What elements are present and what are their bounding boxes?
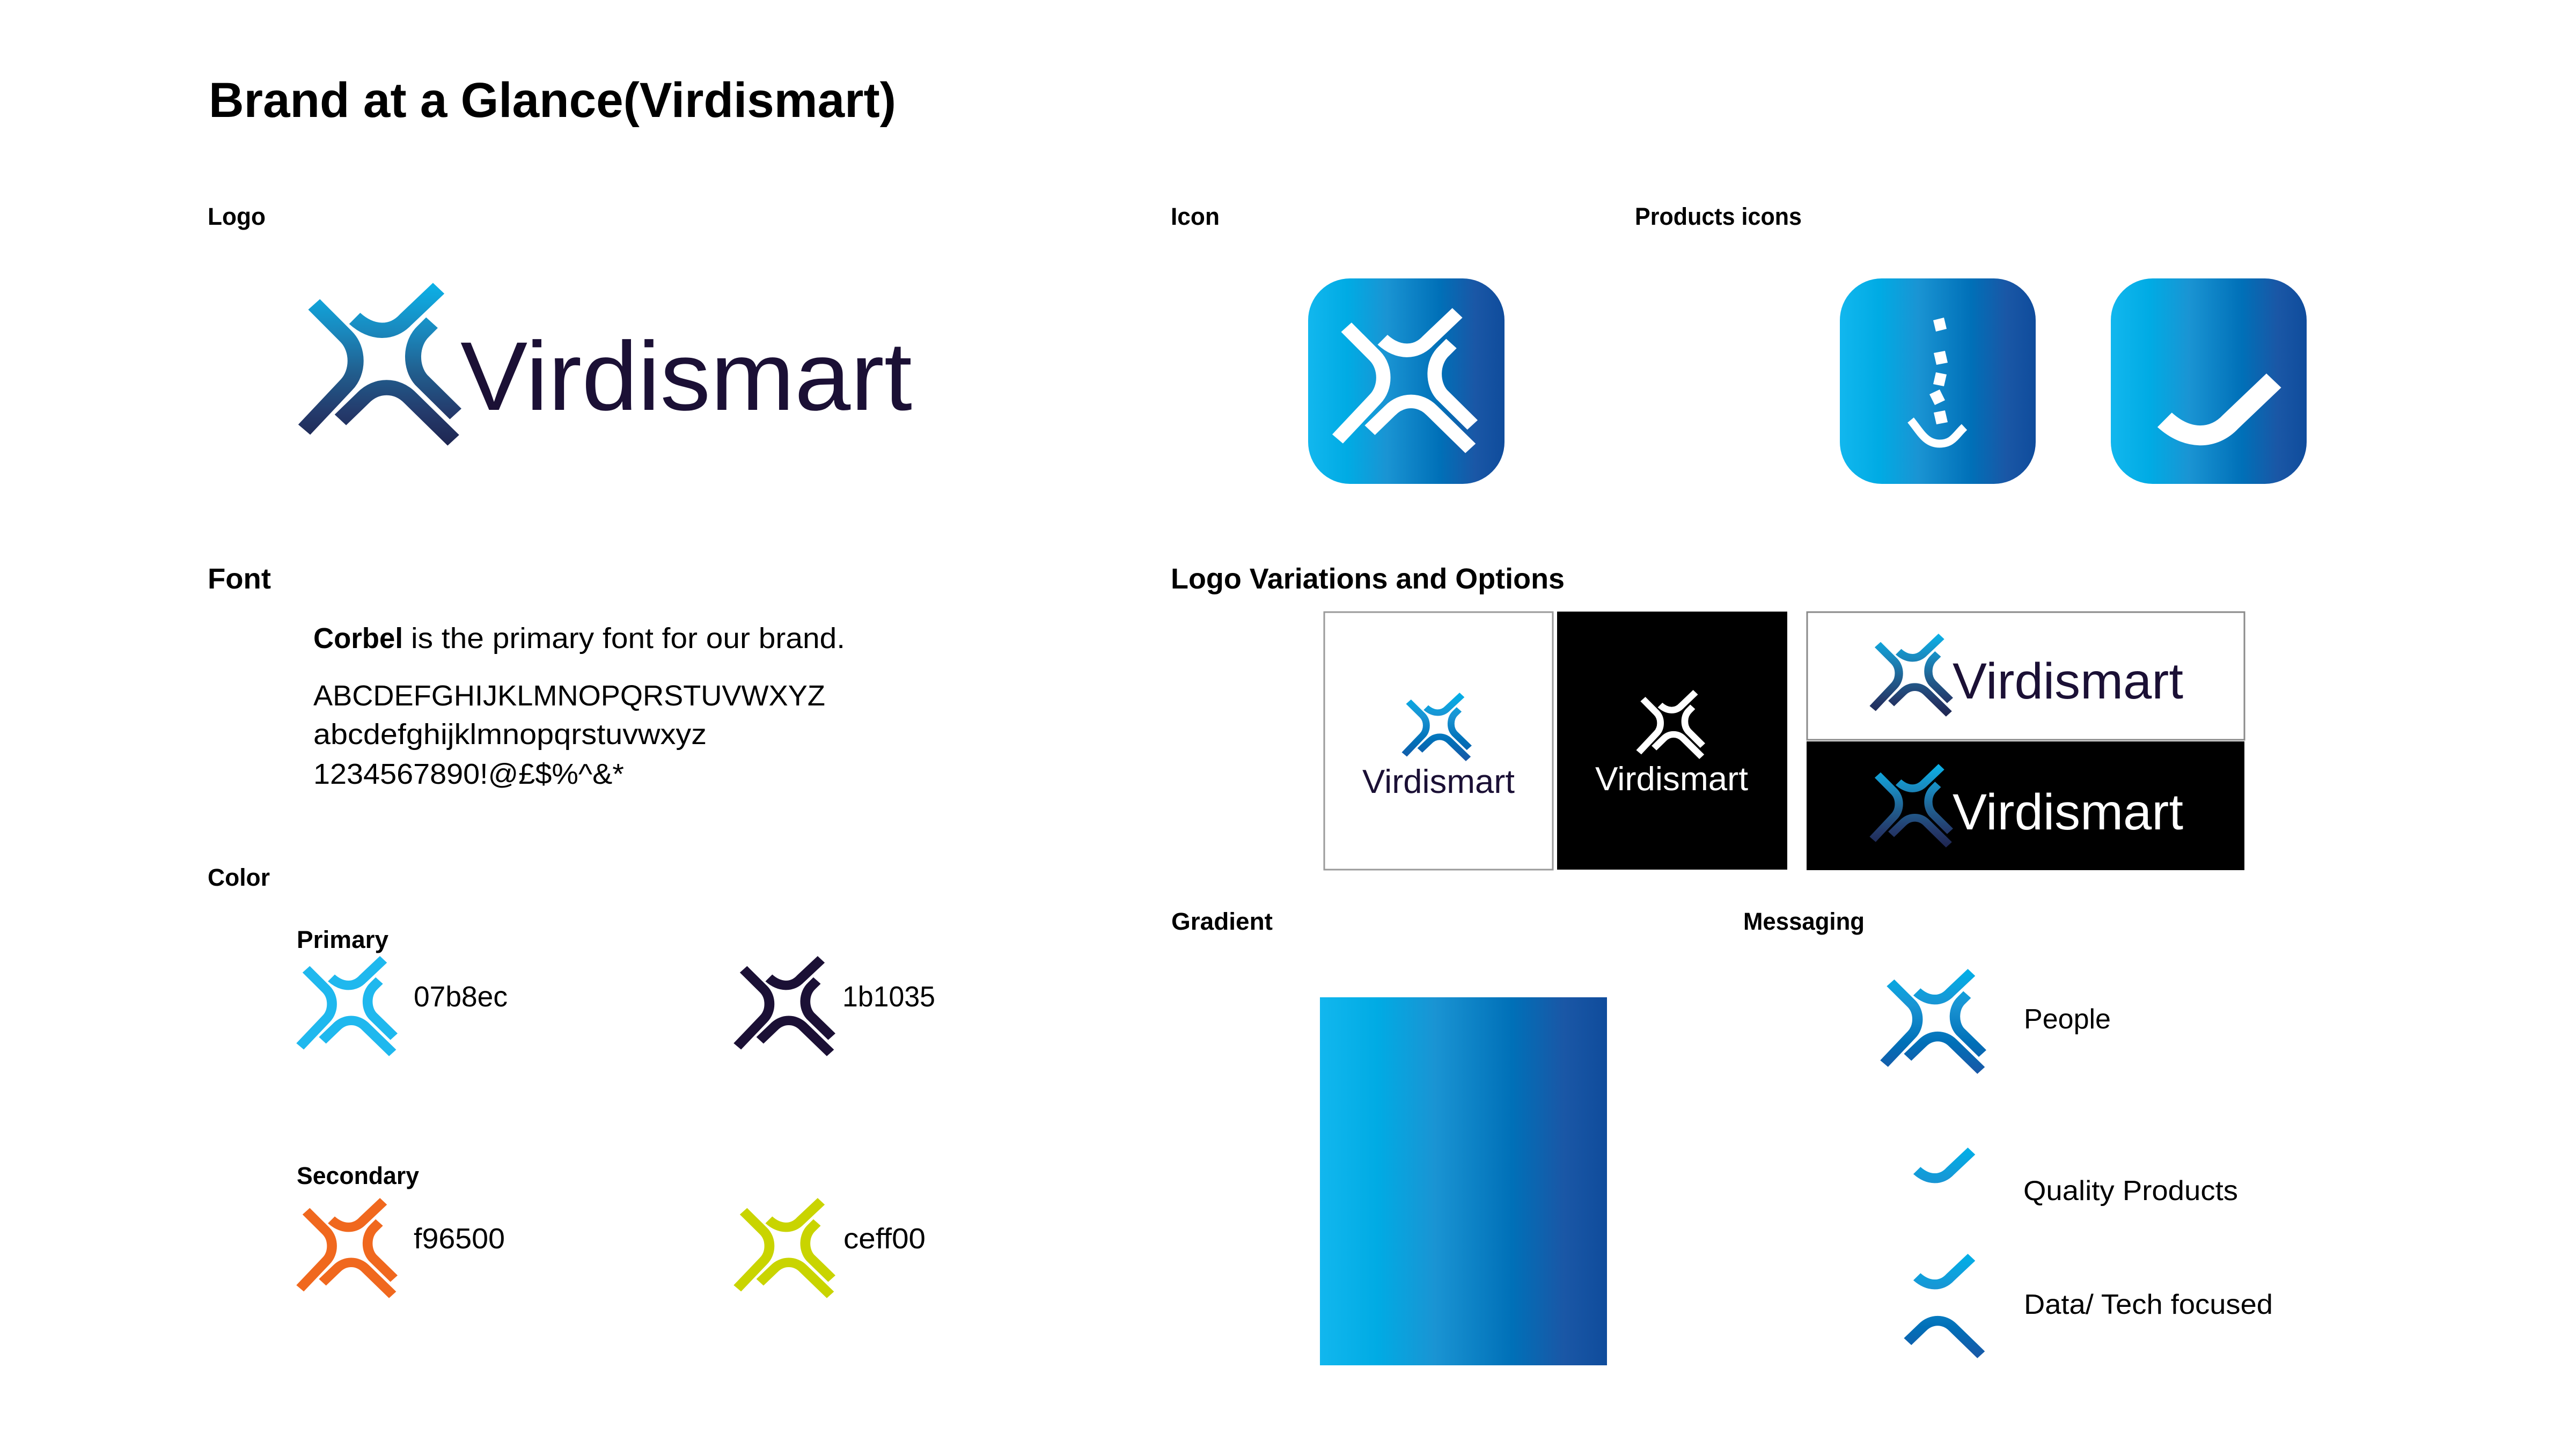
title: Brand at a Glance(Virdismart) xyxy=(209,73,896,128)
app icon xyxy=(1308,278,1504,484)
heading: gradient: Gradient xyxy=(1171,908,1273,935)
font name: Corbel xyxy=(313,622,403,654)
swatch: ceff00: ceff00 xyxy=(843,1223,926,1255)
heading: color: Color xyxy=(208,864,270,891)
heading: secondary: Secondary xyxy=(297,1162,419,1189)
product icon: check xyxy=(2111,278,2307,484)
variation: horizontal on black xyxy=(1807,741,2244,870)
heading: logo: Logo xyxy=(208,203,266,230)
icon: logo mark xyxy=(304,288,456,440)
variation: horizontal on white: Virdismart xyxy=(1953,653,2183,710)
message: quality products xyxy=(1917,1151,2238,1207)
swatch: 1b1035 xyxy=(737,959,935,1053)
swatch: 07b8ec: 07b8ec xyxy=(414,981,508,1013)
font sentence: is the primary font for our brand. xyxy=(411,622,845,654)
font specimen xyxy=(313,622,845,790)
product icon: data dashes xyxy=(1840,278,2036,484)
heading: messaging: Messaging xyxy=(1743,908,1865,935)
heading: icon: Icon xyxy=(1171,203,1220,230)
swatch: f96500 xyxy=(300,1201,505,1295)
swatch: 07b8ec xyxy=(300,959,508,1053)
logo wordmark: Virdismart xyxy=(460,321,912,431)
swatch: ceff00 xyxy=(737,1201,926,1295)
variation: stacked on black: Virdismart xyxy=(1595,761,1748,798)
swatch: 1b1035: 1b1035 xyxy=(842,981,935,1013)
heading: products icons: Products icons xyxy=(1635,203,1802,230)
message: people: People xyxy=(2024,1004,2111,1035)
variation: stacked on white xyxy=(1324,612,1553,870)
lowercase alphabet: abcdefghijklmnopqrstuvwxyz xyxy=(313,718,707,751)
variation: horizontal on black: Virdismart xyxy=(1953,784,2183,841)
message: people xyxy=(1884,973,2111,1070)
gradient swatch xyxy=(1320,997,1607,1365)
message: quality products: Quality Products xyxy=(2023,1175,2238,1207)
heading: font: Font xyxy=(208,563,271,595)
swatch: f96500: f96500 xyxy=(414,1223,505,1255)
variation: stacked on black xyxy=(1557,612,1787,870)
heading: primary: Primary xyxy=(297,926,388,953)
uppercase alphabet: ABCDEFGHIJKLMNOPQRSTUVWXYZ xyxy=(313,680,825,712)
message: data and tech focused xyxy=(1907,1257,2273,1355)
heading: logo variations: Logo Variations and Options xyxy=(1171,563,1565,595)
variation: horizontal on white xyxy=(1807,612,2244,740)
variation: stacked on white: Virdismart xyxy=(1362,763,1515,800)
message: data and tech focused: Data/ Tech focused xyxy=(2024,1289,2273,1320)
numerals and symbols: 1234567890!@£$%^&* xyxy=(313,758,624,790)
primary logo xyxy=(304,288,912,440)
